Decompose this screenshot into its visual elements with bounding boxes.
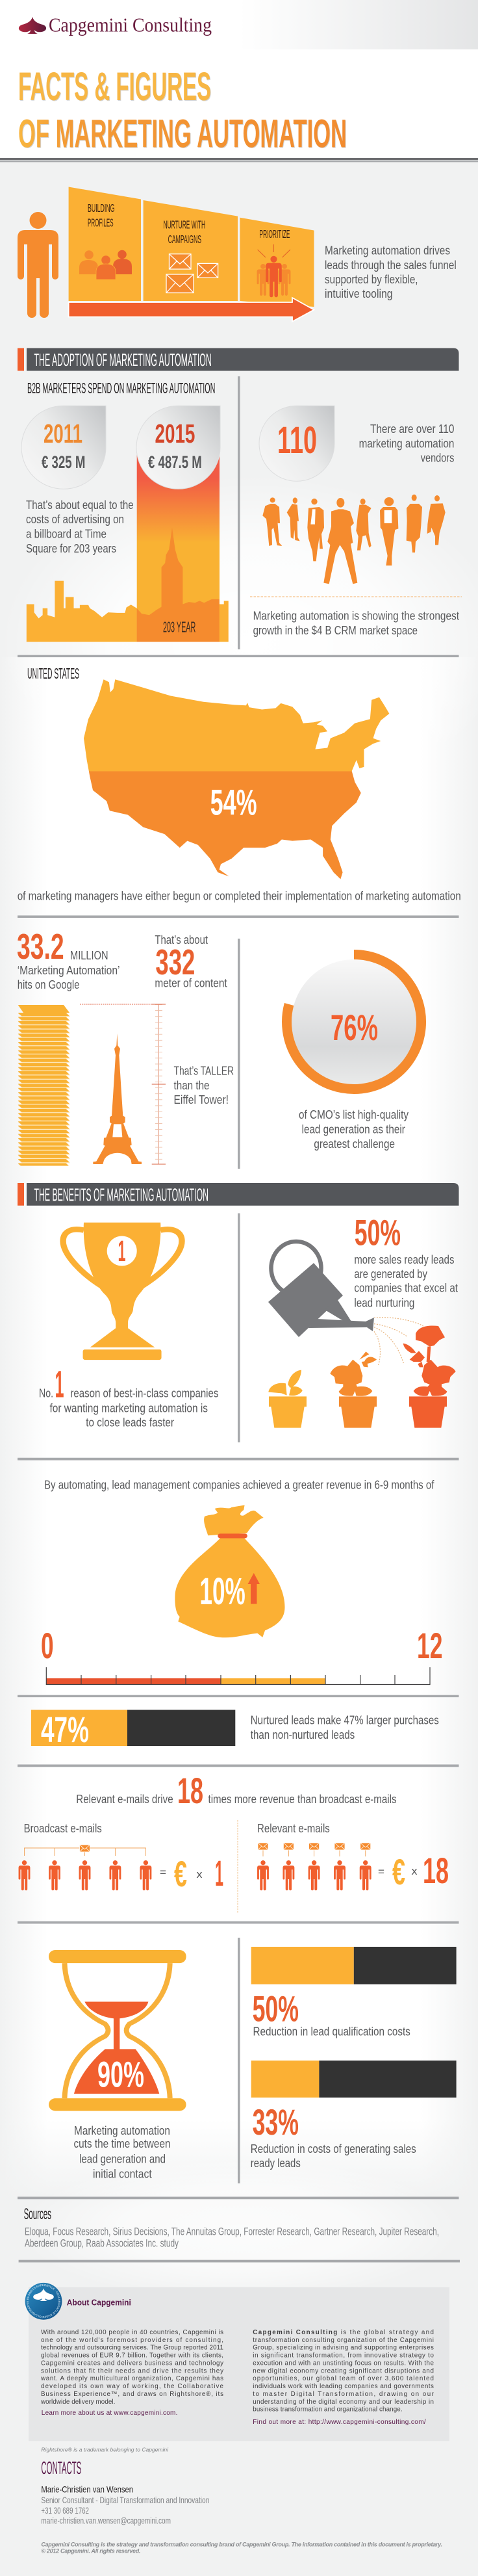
value: 33%: 33% [253, 2101, 299, 2142]
text: source list [25, 2226, 439, 2249]
text: Capgemini Consulting description: Find out more at: http://www.capgemini-consulting.com/ [253, 2419, 426, 2426]
icon: flowering plant [403, 1325, 456, 1428]
value: 90%: 90% [97, 2054, 144, 2094]
group: relevant e-mails [257, 1821, 449, 1892]
text: Capgemini description: developed its own way of working, the Collaborative [41, 2383, 224, 2390]
chart: height ruler [80, 1004, 166, 1164]
icon: hourglass [49, 1950, 186, 2111]
text: Capgemini Consulting description: to master Digital Transformation, drawing on our [253, 2391, 434, 2398]
text: Capgemini description: solutions that fit their needs and drive the results they [41, 2367, 223, 2374]
text: contact details [41, 2495, 209, 2526]
text: trophy caption: reason of best-in-class companies [70, 1386, 218, 1400]
header rule [0, 158, 478, 162]
text: funnel description: intuitive tooling [325, 287, 393, 300]
text: Capgemini Consulting description: transformation consulting organization of the Capgemini [253, 2337, 434, 2344]
panel: revenue [41, 1478, 443, 1685]
bubble: 2015: 2015 [155, 419, 195, 449]
value: 33.2 million: ‘Marketing Automation’ [18, 963, 120, 977]
text: contact details: +31 30 689 1762 [41, 2506, 89, 2516]
text: contact details: Senior Consultant - Digital Transformation and Innovation [41, 2495, 209, 2505]
text: billboard comparison [26, 498, 134, 555]
chart: month timeline: 0 [41, 1625, 54, 1666]
text: nurturing caption: more sales ready leads [354, 1253, 454, 1266]
text: qualification costs: Reduction in lead qualification costs [253, 2024, 410, 2038]
icon: collaborative badge [25, 2283, 62, 2320]
group: relevant e-mails: 18 [423, 1850, 449, 1891]
text: CMO caption [299, 1108, 409, 1151]
text: taller than Eiffel [174, 1063, 234, 1106]
text: nurturing caption: lead nurturing [354, 1295, 414, 1309]
panel: B2B spend [21, 380, 229, 642]
text: nurtured caption [251, 1713, 439, 1741]
text: nurturing caption: companies that excel at [354, 1281, 458, 1295]
text: hourglass caption: initial contact [93, 2167, 152, 2181]
text: Capgemini description: Learn more about us at www.capgemini.com. [42, 2410, 177, 2417]
text: vendors: There are over 110 [370, 422, 454, 436]
bubble: 2011 [21, 406, 106, 489]
text: taller than Eiffel: That’s TALLER [174, 1063, 234, 1077]
text: Capgemini Consulting description: individuals work with leading companies and governments [253, 2383, 434, 2390]
panel: sales funnel: PROFILES [88, 216, 114, 229]
bubble: 2015 [136, 406, 220, 489]
group: relevant e-mails: Relevant e-mails [257, 1821, 330, 1835]
panel: contacts: CONTACTS [41, 2458, 81, 2478]
text: Capgemini Consulting description: understanding of the digital economy and our leadership in [253, 2399, 434, 2406]
bubble: 110 [259, 406, 334, 481]
text: Capgemini Consulting description: business transformation and organizational change. [253, 2406, 403, 2413]
2015 tower column [137, 449, 220, 642]
text: nurturing caption [354, 1253, 458, 1309]
panel: 76% ring chart [287, 954, 421, 1151]
arrow: up [248, 1573, 260, 1604]
text: CMO caption: greatest challenge [314, 1137, 395, 1151]
text: Capgemini Consulting description: in significant transformation, from innovative strategy to [253, 2352, 434, 2360]
text: Capgemini Consulting description [253, 2329, 434, 2426]
text: CMO caption: of CMO’s list high-quality [299, 1108, 409, 1121]
icon: collaborative badge: COLLABORATIVE BUSINESS EXPERIENCE · COLLABORATIVE BUSINESS [27, 2284, 60, 2318]
value: 50% nurturing: 50% [355, 1212, 401, 1253]
panel: cost reductions [251, 1947, 457, 2170]
group: broadcast e-mails: x [196, 1868, 203, 1880]
text: billboard comparison: That’s about equal to the [26, 498, 134, 512]
text: CRM growth: growth in the $4 B CRM market space [253, 623, 418, 637]
icon: medium plant [330, 1351, 377, 1428]
text: funnel description: supported by flexible, [325, 272, 418, 286]
text: Capgemini Consulting description: opportunities, our global team of over 3,600 talented [253, 2375, 434, 2382]
icon: person entering funnel [18, 212, 58, 318]
text: trademark note: Rightshore® is a trademark belonging to Capgemini [41, 2446, 169, 2452]
value: 54%: 54% [210, 782, 257, 823]
text: Capgemini description: want. A deeply multicultural organization, Capgemini has [40, 2375, 223, 2382]
panel: sales funnel: NURTURE WITH [164, 218, 205, 231]
text: billboard comparison: a billboard at Time [26, 527, 107, 541]
value: 33.2 million [17, 926, 120, 991]
skyline chart [27, 528, 229, 642]
text: taller than Eiffel: Eiffel Tower! [174, 1093, 229, 1106]
heading: 18 times revenue: 18 [177, 1770, 203, 1811]
title [18, 64, 347, 156]
panel: trophy: 1 [118, 1234, 126, 1268]
bubble: 2011: € 325 M [42, 452, 85, 472]
panel: sources: Sources [24, 2205, 51, 2223]
panel: vendors [250, 406, 462, 637]
icon: logo spade [19, 17, 46, 34]
text: Capgemini description: With around 120,000 people in 40 countries, Capgemini is [41, 2329, 223, 2336]
heading: about: About Capgemini [67, 2297, 131, 2308]
text: building profiles [88, 202, 114, 229]
bar: 50% [251, 1947, 354, 1984]
value: 33.2 million: 33.2 [17, 926, 64, 967]
bar: 47% [31, 1710, 127, 1746]
text: Capgemini Consulting description: execution and with an unstinting focus on results. With the [253, 2360, 434, 2367]
bubble: 2011: 2011 [44, 419, 82, 449]
text: contact name: Marie-Christien van Wensen [41, 2484, 133, 2494]
text: CMO caption: lead generation as their [302, 1122, 405, 1136]
panel: United States [18, 665, 461, 902]
text: nurturing caption: are generated by [354, 1267, 428, 1281]
value: 332 meter: meter of content [155, 976, 227, 990]
group: broadcast e-mails: Broadcast e-mails [24, 1821, 102, 1835]
panel: relevant e-mails [19, 1770, 449, 1913]
panel: nurtured purchases [31, 1709, 439, 1750]
text: Capgemini description [40, 2329, 224, 2417]
text: Capgemini description: technology and outsourcing services. The Group reported 2011 [41, 2345, 223, 2352]
text: Capgemini description: Capgemini creates and delivers business and technology [41, 2360, 223, 2367]
panel: contacts [41, 2458, 209, 2526]
text: funnel description [325, 243, 457, 300]
icon: watering can [268, 1242, 374, 1337]
value: 50%: 50% [253, 1988, 299, 2029]
text: vendors: vendors [421, 451, 454, 464]
value: 33.2 million: hits on Google [18, 978, 80, 991]
group: broadcast e-mails: € [174, 1853, 187, 1894]
text: legal note: Capgemini Consulting is the strategy and transformation consulting brand of Capgemini Group. The information contained in this document is proprietary. [41, 2541, 442, 2547]
panel: sales funnel [69, 187, 314, 322]
value: 33.2 million: MILLION [70, 948, 108, 962]
text: Capgemini description: one of the world's foremost providers of consulting, [41, 2337, 223, 2344]
text: building profiles: BUILDING [88, 202, 114, 215]
text: Capgemini description: global revenues of EUR 9.7 billion. Together with its clients, [41, 2352, 223, 2360]
panel: sources [24, 2205, 439, 2249]
text: Capgemini description: Business Experience™, and draws on Rightshore®, its [41, 2391, 223, 2398]
text: generating leads [251, 2142, 416, 2170]
logo wordmark: Capgemini Consulting [49, 13, 212, 36]
bubble: 110: 110 [277, 419, 317, 462]
icon: money bag [175, 1505, 285, 1637]
panel: relevant e-mails: 1 [215, 1853, 223, 1893]
panel: B2B spend: B2B MARKETERS SPEND ON MARKETING AUTOMATION [27, 380, 215, 397]
section heading: adoption: THE ADOPTION OF MARKETING AUTOMATION [34, 350, 212, 370]
icon: profile busts [79, 250, 132, 280]
icon: business people silhouettes [262, 495, 446, 584]
chart: month timeline [41, 1625, 443, 1685]
text: trophy caption: 1 [55, 1364, 64, 1406]
text: vendors: marketing automation [359, 437, 454, 450]
text: source list: Aberdeen Group, Raab Associates Inc. study [25, 2237, 179, 2249]
text: hourglass caption: Marketing automation [74, 2124, 170, 2137]
value: 76%: 76% [331, 1007, 378, 1048]
text: trophy caption: No. [39, 1386, 53, 1400]
text: generating leads: Reduction in costs of generating sales [251, 2142, 416, 2155]
text: contact details: marie-christien.van.wensen@capgemini.com [41, 2516, 171, 2526]
text: billboard comparison: Square for 203 years [26, 541, 116, 555]
heading: 18 times revenue [76, 1770, 397, 1811]
text: hourglass caption [74, 2124, 170, 2181]
panel: trophy [39, 1223, 218, 1429]
title: FACTS & FIGURES [18, 64, 211, 109]
heading: 18 times revenue: times more revenue than broadcast e-mails [208, 1792, 396, 1806]
icon: trophy [63, 1223, 182, 1360]
text: nurtured caption: than non-nurtured leads [251, 1728, 355, 1741]
text: funnel description: Marketing automation drives [325, 243, 450, 257]
text: billboard comparison: costs of advertising on [26, 512, 124, 526]
group: relevant e-mails: = [378, 1866, 384, 1878]
group: broadcast e-mails: = [160, 1866, 166, 1879]
text: trophy caption: for wanting marketing automation is [49, 1401, 208, 1414]
value: 47%: 47% [41, 1709, 89, 1750]
value: 332 meter: That’s about [155, 933, 208, 946]
bar: 33% [251, 2061, 319, 2098]
text: Capgemini Consulting description: Capgemini Consulting is the global strategy and [253, 2329, 434, 2336]
value: 332 meter: 332 [155, 942, 195, 982]
group: relevant e-mails: x [412, 1865, 418, 1877]
text: Capgemini Consulting description: Group, specializing in advising and supporting enterprises [253, 2345, 434, 2352]
group: relevant e-mails: € [392, 1851, 405, 1892]
text: hourglass caption: cuts the time between [74, 2137, 170, 2150]
bubble: 2015: € 487.5 M [148, 452, 202, 472]
map: United States [84, 679, 389, 879]
icon: stack of pages [18, 1005, 70, 1166]
water streams [374, 1318, 423, 1365]
text: Capgemini description: worldwide delivery model. [40, 2399, 115, 2406]
panel: sales funnel: PRIORITIZE [260, 228, 290, 241]
value: 332 meter [155, 933, 227, 990]
panel: lead nurturing [268, 1212, 458, 1428]
text: taller than Eiffel: than the [174, 1078, 209, 1092]
text: legal note: © 2012 Capgemini. All rights reserved. [41, 2547, 140, 2554]
icon: prioritized lead [257, 244, 290, 297]
text: trophy caption: to close leads faster [86, 1416, 174, 1429]
icon: Eiffel Tower [93, 1034, 142, 1164]
text: hourglass caption: lead generation and [79, 2152, 166, 2166]
panel: B2B spend: 203 YEAR [163, 618, 195, 635]
text: CRM growth [253, 608, 459, 637]
text: vendors [359, 422, 454, 464]
panel: Google hits [17, 926, 234, 1166]
icon: small plant [268, 1370, 307, 1428]
text: Capgemini Consulting description: new digital economy creating significant disruptions and [253, 2367, 434, 2374]
chart: month timeline: 12 [417, 1625, 443, 1666]
text: trophy caption [39, 1364, 218, 1429]
text: nurtured caption: Nurtured leads make 47% larger purchases [251, 1713, 439, 1727]
group: broadcast e-mails [19, 1821, 223, 1894]
text: nurture with campaigns: CAMPAIGNS [168, 233, 201, 246]
header band with logo [0, 0, 478, 49]
section heading: benefits: THE BENEFITS OF MARKETING AUTOMATION [34, 1184, 208, 1205]
text: generating leads: ready leads [251, 2156, 301, 2170]
panel: United States: UNITED STATES [27, 665, 79, 682]
text: nurture with campaigns [164, 218, 205, 246]
value: 10%: 10% [199, 1570, 245, 1613]
arrow [69, 298, 314, 322]
panel: hourglass [49, 1950, 186, 2181]
icon: envelopes [166, 254, 218, 293]
text: legal note [41, 2541, 442, 2554]
heading: 18 times revenue: Relevant e-mails drive [76, 1792, 173, 1806]
